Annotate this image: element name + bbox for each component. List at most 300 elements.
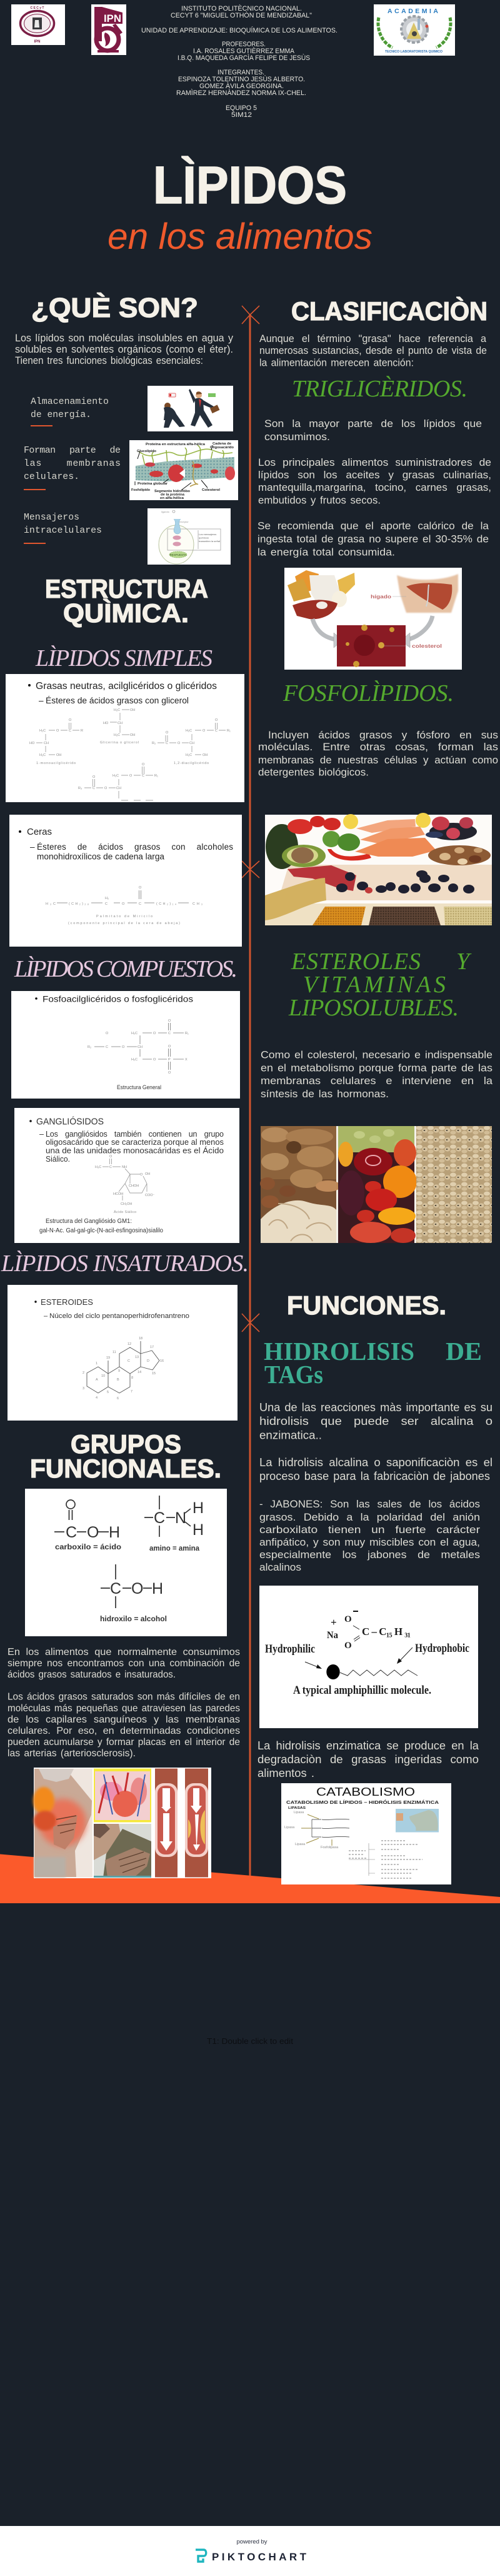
- logo: CECyT seal: IPN: [34, 40, 41, 44]
- chemical structure: ciclopentanoperhidrofenantreno: 10: [101, 1374, 105, 1378]
- panel: ceras: [9, 815, 242, 947]
- heading: lipidos insaturados: LÌPIDOS INSATURADOS.: [1, 1250, 249, 1277]
- panel: gangliosidos: Siálico.: [46, 1155, 70, 1164]
- text: mayor parte de lipidos: [264, 418, 482, 443]
- image: membrana celular: Oligosacárido: [210, 446, 234, 450]
- chemical structure: acido sialico: Ácido Siálico: [114, 1210, 136, 1214]
- chemical structure: fosfoglicerido: O: [168, 1045, 171, 1049]
- chemical structure: fosfoglicerido: O: [153, 1058, 156, 1062]
- chemical structures of glycerides: OH: [130, 733, 135, 737]
- diagram: arteria obstruida: [185, 1768, 208, 1877]
- group: carboxilo: C: [66, 1524, 77, 1541]
- chemical structure: ciclopentanoperhidrofenantreno: A: [96, 1378, 98, 1382]
- group: amino: [144, 1496, 204, 1552]
- text: fosfolipidos: moléculas. Entre otras cosas, forman las: [258, 741, 498, 753]
- image: mensajeros quimicos: Los mensajeros: [199, 533, 216, 536]
- chemical structures of glycerides: C: [69, 729, 71, 733]
- image: mensajeros quimicos: receptor: [179, 520, 189, 523]
- image: catabolismo: Lipasa: [294, 1811, 304, 1814]
- item: membranas celulares: celulares.: [24, 471, 79, 482]
- text: alimentos y acidos grasos: En los alimentos que normalmente consumimos: [8, 1647, 240, 1658]
- text: jabones: grasos. Debido a la polaridad del anión: [259, 1511, 480, 1523]
- chemical structure: palmitato de miricilo: (CH₂)₂₈: [69, 902, 89, 906]
- logo: CECyT seal: [11, 4, 65, 45]
- text: jabones: anfipático, y son muy miscibles con el agua,: [259, 1536, 480, 1548]
- text: definicion de lipidos: Los lípidos son moléculas insolubles en agua y: [15, 332, 233, 344]
- chemical structure: ciclopentanoperhidrofenantreno: 3: [82, 1387, 84, 1391]
- image: catabolismo: CATABOLISMO: [316, 1786, 415, 1798]
- panel: gangliosidos: Los gangliósidos también contienen un grupo: [46, 1130, 224, 1139]
- chemical structures of glycerides: H₂C: [186, 753, 192, 757]
- image: molecula anfifilica: Na: [327, 1630, 338, 1641]
- image: molecula anfifilica: Hydrophilic: [265, 1643, 315, 1656]
- salmon: [355, 819, 436, 857]
- panel: esteroides: ESTEROIDES: [41, 1297, 93, 1307]
- photo: nueces y anacardos: [260, 1126, 341, 1243]
- image: catabolismo: Lipasa: [295, 1843, 306, 1846]
- chemical structures of glycerides: O: [202, 729, 206, 733]
- text: alimentos y acidos grasos: pueden acumularse y formar placas en el interior de: [8, 1737, 240, 1748]
- text: alimentos y acidos grasos: [8, 1647, 240, 1759]
- panel: ceras: monohidroxílicos de cadena larga: [37, 852, 164, 862]
- chemical structure: ciclopentanoperhidrofenantreno: 17: [150, 1346, 154, 1349]
- image: frutos secos, frutas y legumbres: [260, 1126, 492, 1243]
- chemical structure: acido sialico: CH₂OH: [121, 1202, 132, 1206]
- text: colesterol: membranas celulares e interviene en la: [261, 1075, 493, 1087]
- image: membrana celular: Colesterol: [202, 488, 221, 492]
- logo: Academia: ACADEMIA: [388, 8, 438, 15]
- image: membrana celular: de la proteína: [161, 493, 185, 496]
- image: catabolismo: LIPASAS: [288, 1806, 306, 1810]
- chemical structures of glycerides: H₂C: [114, 708, 120, 712]
- chemical structure: fosfoglicerido: O: [168, 1019, 171, 1023]
- logo: IPN shield: [91, 4, 126, 55]
- footer: powered by piktochart: powered by: [236, 2538, 268, 2545]
- text: alimentos y acidos grasos: ácidos grasos saturados e insaturados.: [8, 1669, 176, 1680]
- image: mensajeros quimicos: [148, 508, 231, 565]
- image: mensajeros quimicos: RESPUESTA: [170, 553, 186, 556]
- chemical structures of glycerides: [29, 708, 231, 800]
- chemical structure: acido sialico: OH: [145, 1172, 150, 1176]
- header text block: CECYT 6 "MIGUEL OTHÒN DE MENDIZABAL": [171, 11, 312, 19]
- note: placeholder text: T1: Double click to edit: [207, 2036, 293, 2046]
- chemical structures of glycerides: H₂C: [39, 753, 46, 757]
- header text block: GOMEZ ÀVILA GEORGINA.: [199, 82, 284, 90]
- panel: gangliosidos: [14, 1108, 239, 1243]
- chemical structure: fosfoglicerido: H₂C: [131, 1032, 138, 1035]
- image: catabolismo: [281, 1783, 451, 1884]
- image: membrana celular: Proteína en estructura alfa-hélica: [146, 443, 206, 446]
- text: colesterol: [261, 1049, 493, 1100]
- chemical structure: ciclopentanoperhidrofenantreno: 12: [128, 1342, 131, 1346]
- chemical structure: fosfoglicerido: O: [168, 1071, 171, 1075]
- group: carboxilo: carboxilo = ácido: [55, 1542, 121, 1551]
- chemical structure: ciclopentanoperhidrofenantreno: 11: [112, 1351, 116, 1354]
- image: mensajeros quimicos: químicos: [199, 536, 209, 539]
- chemical structures of glycerides: CH: [189, 742, 194, 745]
- image: membrana celular: Segmento hidrofóbo: [154, 490, 191, 493]
- pomegranate seeds and blueberries: [288, 865, 474, 893]
- header text block: RAMÌREZ HERNÀNDEZ NORMA IX-CHEL.: [176, 89, 306, 97]
- item: mensajeros intracelulares: Mensajeros: [24, 512, 79, 523]
- chemical structure: fosfoglicerido: X: [185, 1058, 188, 1062]
- image: membrana celular: Fosfolípido: [131, 488, 151, 492]
- heading: hidrolisis de tags: HIDROLISIS: [264, 1337, 414, 1366]
- chemical structure: ciclopentanoperhidrofenantreno: 16: [160, 1359, 164, 1363]
- text: aporte calorico: la energía total consumida.: [258, 546, 395, 558]
- text: aunque el termino grasa: Aunque el término "grasa" hace referencia a: [259, 333, 487, 345]
- logo: IPN shield: IPN: [104, 13, 121, 24]
- heading: clasificacion: CLASIFICACIÒN: [291, 296, 488, 326]
- text: jabones: [259, 1498, 480, 1573]
- image: membrana celular: [129, 440, 238, 500]
- text: principales alimentos: [258, 456, 491, 506]
- heading: esteroles y vitaminas liposolubles: LIPOSOLUBLES.: [288, 995, 459, 1021]
- footer: powered by piktochart: [0, 2526, 500, 2576]
- panel: ceras: –: [30, 842, 35, 852]
- text: aunque el termino grasa: [259, 333, 487, 369]
- chemical structures of glycerides: 1-monoacilglicérido: [36, 762, 76, 765]
- image: catabolismo: Lipasa: [284, 1826, 295, 1829]
- chemical structure: ciclopentanoperhidrofenantreno: 6: [117, 1397, 119, 1401]
- group: amino: H: [192, 1499, 204, 1517]
- group: carboxilo: O: [87, 1524, 99, 1541]
- text: aporte calorico: ingesta total de grasa no supere el 30-35% de: [258, 533, 489, 545]
- header text block: I.A. ROSALES GUTIÈRREZ EMMA: [193, 47, 295, 55]
- group: hidroxilo: hidroxilo = alcohol: [100, 1614, 167, 1623]
- photo: frutas: [338, 1126, 417, 1243]
- header text block: 5IM12: [231, 111, 252, 119]
- tomatoes and lemons: [288, 813, 431, 834]
- text: principales alimentos: mantequilla,margarina, tocino, carnes grasas,: [258, 481, 491, 493]
- group: hidroxilo: C: [110, 1580, 121, 1597]
- chemical structure: ciclopentanoperhidrofenantreno: 5: [107, 1391, 109, 1394]
- chemical structure: palmitato de miricilo: C: [139, 902, 141, 906]
- text: definicion de lipidos: solubles en solventes orgánicos (como el éter).: [15, 343, 233, 355]
- chemical structures of glycerides: O: [56, 729, 59, 733]
- heading: hidrolisis de tags: DE: [446, 1337, 482, 1366]
- chemical structures of glycerides: O: [69, 718, 72, 722]
- chemical structures of glycerides: OH: [56, 753, 61, 757]
- chemical structures of glycerides: H₂C: [39, 729, 46, 733]
- heading: fosfolipidos: FOSFOLÌPIDOS.: [282, 680, 454, 707]
- image: molecula anfifilica: O: [344, 1641, 352, 1651]
- image: molecula anfifilica: +: [331, 1616, 337, 1628]
- item: almacenamiento de energia: de energía.: [31, 410, 91, 420]
- text: hidrolisis: proceso base para la fabricaciòn de jabones: [259, 1470, 490, 1482]
- header text block: EQUIPO 5: [226, 104, 257, 112]
- text: definicion de lipidos: Tienen tres funciones biológicas esenciales:: [15, 355, 203, 366]
- text: hidrolisis: Una de las reacciones màs importante es su: [259, 1401, 492, 1414]
- chemical structures of glycerides: CH: [44, 742, 49, 745]
- chemical structure: palmitato de miricilo: C: [105, 902, 108, 906]
- chemical structures of glycerides: R: [81, 729, 83, 733]
- text: alimentos y acidos grasos: Los ácidos grasos saturados son más difíciles de en: [8, 1692, 240, 1702]
- chemical structures of glycerides: OH: [202, 753, 208, 757]
- item: mensajeros intracelulares: [24, 512, 102, 544]
- chemical structures of glycerides: H₂C: [112, 774, 119, 778]
- diagram: arteria sana: [155, 1768, 178, 1877]
- chemical structure: acido sialico: COO⁻: [145, 1194, 155, 1197]
- chemical structure: ciclopentanoperhidrofenantreno: 2: [82, 1371, 84, 1375]
- nuts: [428, 845, 491, 865]
- chemical structures of glycerides: CH: [118, 722, 122, 725]
- text: colesterol: síntesis de las hormonas.: [261, 1088, 389, 1100]
- heading: lipidos simples: LÌPIDOS SIMPLES: [35, 645, 212, 672]
- chemical structure: palmitato de miricilo: (CH₂)₁₄: [156, 902, 177, 906]
- chemical structure: acido sialico: O: [140, 1173, 143, 1177]
- heading: grupos funcionales: FUNCIONALES.: [30, 1454, 221, 1483]
- chemical structures of glycerides: R₁: [154, 774, 158, 778]
- group: carboxilo: [54, 1500, 121, 1551]
- heading: hidrolisis de tags: TAGs: [264, 1360, 323, 1389]
- chemical structure: palmitato de miricilo: H₂: [105, 897, 109, 900]
- image: colesterol e higado: hígado: [371, 594, 391, 600]
- text: principales alimentos: lípidos son los aceites y grasas culinarias,: [258, 469, 491, 481]
- text: alimentos y acidos grasos: de los capilares sanguíneos y las membranas: [8, 1714, 240, 1725]
- panel: grasas neutras: Ésteres de ácidos grasos con glicerol: [46, 696, 189, 705]
- image: energia: [148, 386, 233, 431]
- item: almacenamiento de energia: Almacenamiento: [31, 396, 109, 407]
- title: LÌPIDOS: [153, 156, 347, 214]
- broccoli: [322, 831, 360, 851]
- chemical structure: palmitato de miricilo: Palmitato de Miricilo: [96, 915, 152, 918]
- text: fosfolipidos: membranas de nuestras células y actúan como: [258, 754, 498, 766]
- chemical structure: fosfoglicerido: P: [168, 1058, 171, 1062]
- logo: CECyT seal: C E C y T: [31, 6, 44, 10]
- logo: Academia: TECNICO LABORATORISTA QUIMICO: [385, 50, 442, 54]
- chemical structures of glycerides: CH: [116, 787, 121, 790]
- group: amino: N: [175, 1509, 186, 1527]
- logo: Academia: [374, 4, 455, 56]
- panel: grasas neutras: [6, 674, 244, 802]
- chemical structures of glycerides: O: [92, 775, 96, 779]
- text: definicion de lipidos: [15, 332, 233, 366]
- chemical structure: palmitato de miricilo: [46, 886, 202, 925]
- image: mensajeros quimicos: ligando: [161, 510, 170, 513]
- image: mensajeros quimicos: transmiten la señal: [199, 540, 220, 543]
- central timeline with chevrons: [242, 306, 259, 1876]
- chemical structure: palmitato de miricilo: O: [139, 886, 142, 890]
- panel: ceras: Ésteres de ácidos grasos con alcoholes: [37, 842, 233, 852]
- chemical structure: ciclopentanoperhidrofenantreno: 4: [96, 1396, 98, 1400]
- heading: trigliceridos: TRIGLICÈRIDOS.: [292, 376, 468, 402]
- plate: [278, 865, 492, 900]
- text: colesterol: en el metabolismo porque forma parte de las: [261, 1062, 492, 1074]
- chemical structure: acido sialico: H₃C: [95, 1165, 101, 1169]
- chemical structure: acido sialico: O: [109, 1155, 112, 1159]
- image: colesterol e higado: colesterol: [412, 643, 442, 649]
- chemical structure: ciclopentanoperhidrofenantreno: 9: [118, 1369, 120, 1373]
- image: catabolismo: Fosfolipasa: [321, 1846, 339, 1849]
- image: molecula anfifilica: [259, 1586, 478, 1728]
- chili pepper: [328, 849, 371, 860]
- chemical structure: fosfoglicerido: C: [106, 1045, 108, 1049]
- image: molecula anfifilica: A typical amphiphillic molecule.: [293, 1684, 431, 1697]
- image: membrana celular: Proteína globular: [138, 482, 168, 486]
- chemical structures of glycerides: HO: [29, 742, 35, 745]
- image: colesterol e higado: [284, 568, 462, 670]
- chemical structure: fosfoglicerido: CH: [138, 1045, 142, 1049]
- chemical structures of glycerides: O: [142, 763, 145, 767]
- image: membrana celular: Cadena de: [212, 442, 231, 446]
- chemical structure: acido sialico: C: [109, 1165, 112, 1169]
- text: jabones: especialmente los jabones de metales: [259, 1549, 480, 1561]
- chemical structure: ciclopentanoperhidrofenantreno: 15: [152, 1372, 156, 1376]
- chemical structure: fosfoglicerido: H₂C: [131, 1058, 138, 1062]
- panel: fosfoacilgliceridos: Estructura General: [117, 1084, 161, 1091]
- heading: hidrolisis de tags: [264, 1337, 482, 1389]
- chemical structures of glycerides: O: [178, 742, 181, 745]
- chemical structure: ciclopentanoperhidrofenantreno: 14: [138, 1371, 141, 1374]
- chemical structure: ciclopentanoperhidrofenantreno: 8: [131, 1376, 133, 1380]
- text: jabones: alcalinos: [259, 1561, 301, 1573]
- chemical structures of glycerides: O: [166, 731, 169, 735]
- image: molecula anfifilica: O: [344, 1614, 352, 1624]
- item: almacenamiento de energia: [31, 396, 109, 426]
- heading: lipidos compuestos: LÌPIDOS COMPUESTOS.: [14, 956, 238, 982]
- icon: piktochart logo: [196, 2550, 206, 2562]
- panel: gangliosidos: oligosacárido que se caracteriza porque al menos: [46, 1138, 224, 1147]
- chemical structures of glycerides: R₃: [78, 787, 82, 790]
- chemical structure: ciclopentanoperhidrofenantreno: [82, 1337, 164, 1401]
- chemical structures of glycerides: C: [142, 774, 144, 778]
- heading: esteroles y vitaminas liposolubles: ESTEROLES: [291, 948, 421, 975]
- header text block: INTEGRANTES.: [218, 69, 264, 76]
- chemical structure: fosfoglicerido: R₂: [88, 1045, 91, 1049]
- avocado: [266, 824, 326, 869]
- panel: gangliosidos: una de las unidades monosacáridas es el Ácido: [46, 1145, 224, 1155]
- panel: grasas neutras: –: [39, 696, 44, 705]
- text: mayor parte de lipidos: consumimos.: [264, 431, 330, 443]
- chemical structures of glycerides: C: [92, 787, 95, 790]
- text: principales alimentos: Los principales alimentos suministradores de: [258, 456, 491, 468]
- image: enfermedad cardiaca y arterias: [33, 1768, 211, 1878]
- text: jabones: carboxilato tienen un fuerte carácter: [259, 1524, 480, 1536]
- text: colesterol: Como el colesterol, necesario e indispensable: [261, 1049, 492, 1060]
- text: hidrolisis enzimatica: alimentos .: [258, 1767, 314, 1779]
- chemical structures of glycerides: R₂: [152, 742, 156, 745]
- chemical structure: ciclopentanoperhidrofenantreno: D: [147, 1359, 149, 1363]
- chemical structure: fosfoglicerido: O: [106, 1032, 109, 1035]
- chemical structure: palmitato de miricilo: O: [122, 902, 125, 906]
- text: principales alimentos: embutidos y frutos secos.: [258, 494, 381, 506]
- chemical structure: fosfoglicerido: O: [122, 1045, 125, 1049]
- panel: esteroides: Núcelo del ciclo pentanoperhidrofenantreno: [49, 1312, 189, 1320]
- heading: estructura quimica: ESTRUCTURA: [45, 574, 208, 603]
- chemical structures of glycerides: H₂C: [114, 733, 120, 737]
- chemical structure: ciclopentanoperhidrofenantreno: 18: [139, 1337, 142, 1341]
- group: hidroxilo: O: [131, 1580, 143, 1597]
- image: membrana celular: en alfa-hélica: [160, 496, 184, 500]
- chemical structures of glycerides: 1,2-diacilglicérido: [174, 762, 209, 765]
- header text block: PROFESORES.: [222, 41, 266, 48]
- text: aunque el termino grasa: numerosas sustancias, desde el punto de vista de: [259, 345, 487, 356]
- group: carboxilo: H: [109, 1524, 120, 1541]
- text: hidrolisis enzimatica: degradaciòn de grasas ingeridas como: [258, 1753, 479, 1766]
- heading: esteroles y vitaminas liposolubles: VITAMINAS: [303, 972, 446, 998]
- photo: frijoles: [416, 1126, 492, 1243]
- photo: corazon: [94, 1768, 151, 1822]
- image: molecula anfifilica: C – C₁₅ H ₃₁: [362, 1626, 411, 1638]
- text: jabones: - JABONES: Son las sales de los ácidos: [259, 1498, 480, 1510]
- text: alimentos y acidos grasos: las arterias (arteriosclerosis).: [8, 1748, 136, 1759]
- chemical structures of glycerides: O: [129, 774, 132, 778]
- image: alimentos con grasas saludables: [265, 813, 492, 925]
- heading: grupos funcionales: [30, 1429, 221, 1483]
- heading: que son: ¿QUÈ SON?: [31, 292, 198, 323]
- panel: gangliosidos: Estructura del Gangliósido GM1:: [46, 1217, 132, 1225]
- group: amino: H: [192, 1521, 204, 1539]
- item: mensajeros intracelulares: intracelulares: [24, 525, 102, 536]
- chemical structure: acido sialico: HCOH: [113, 1192, 123, 1196]
- photo: dolor en el pecho: [33, 1768, 92, 1877]
- text: fosfolipidos: Incluyen ácidos grasos y fósforo en sus: [268, 729, 498, 741]
- panel: fosfoacilgliceridos: [11, 991, 240, 1099]
- berries and strawberries: [426, 817, 477, 840]
- header text block: [141, 4, 338, 119]
- chemical structure: palmitato de miricilo: H₃C: [46, 902, 56, 906]
- heading: estructura quimica: QUÌMICA.: [63, 598, 189, 628]
- chemical structure: acido sialico: NH: [122, 1165, 127, 1169]
- chemical structure: fosfoglicerido: [88, 1019, 189, 1075]
- subtitle: en los alimentos: [108, 216, 372, 257]
- image: catabolismo: CATABOLISMO DE LÍPIDOS – HIDRÓLISIS ENZIMÁTICA: [286, 1799, 439, 1805]
- heading: grupos funcionales: GRUPOS: [71, 1429, 181, 1459]
- text: alimentos y acidos grasos: celulares. Por eso, en determinadas condiciones: [8, 1726, 240, 1736]
- text: alimentos y acidos grasos: moléculas más pequeñas que atraviesen las paredes: [8, 1703, 240, 1714]
- photo: hombre con mano en el pecho: [94, 1824, 151, 1878]
- chemical structures of glycerides: HO: [103, 722, 109, 725]
- chemical structure: fosfoglicerido: R₁: [185, 1032, 189, 1035]
- text: hidrolisis: [259, 1401, 492, 1482]
- chemical structure: ciclopentanoperhidrofenantreno: C: [128, 1359, 130, 1363]
- text: aunque el termino grasa: la alimentación merecen atención:: [259, 356, 414, 369]
- chemical structure: ciclopentanoperhidrofenantreno: 13: [135, 1356, 139, 1359]
- item: membranas celulares: las membranas: [24, 458, 121, 469]
- text: hidrolisis: La hidrolisis alcalina o saponificaciòn es el: [259, 1456, 492, 1469]
- text: hidrolisis enzimatica: La hidrolisis enzimatica se produce en la: [258, 1739, 479, 1752]
- text: aporte calorico: [258, 520, 489, 558]
- chemical structure: acido sialico: CHOH: [129, 1184, 139, 1188]
- chemical structures of glycerides: R₁: [227, 729, 231, 733]
- chemical structure: ciclopentanoperhidrofenantreno: B: [117, 1378, 119, 1382]
- item: membranas celulares: Forman parte de: [24, 445, 121, 456]
- text: fosfolipidos: detergentes biológicos.: [258, 767, 369, 778]
- text: alimentos y acidos grasos: siempre nos encontramos con una combinación de: [8, 1658, 240, 1669]
- panel: esteroides: [8, 1285, 238, 1421]
- chemical structures of glycerides: O: [104, 787, 108, 790]
- chemical structure: ciclopentanoperhidrofenantreno: 1: [96, 1362, 98, 1366]
- text: hidrolisis: hidrolisis que puede ser alcalina o: [259, 1415, 492, 1427]
- chemical structures of glycerides: O: [215, 718, 218, 722]
- panel: ceras: Ceras: [27, 827, 52, 837]
- chemical structures of glycerides: C: [215, 729, 218, 733]
- panel: gangliosidos: gal-N-Ac. Gal-gal-glc-(N-acil-esfingosina)sialilo: [39, 1227, 163, 1234]
- heading: esteroles y vitaminas liposolubles: [288, 948, 472, 1021]
- footer: powered by piktochart: PIKTOCHART: [212, 2551, 307, 2563]
- header text block: ESPINOZA TOLENTINO JESÙS ALBERTO.: [178, 75, 305, 83]
- heading: funciones: FUNCIONES.: [287, 1291, 446, 1320]
- header text block: UNIDAD DE APRENDIZAJE: BIOQUÍMICA DE LOS ALIMENTOS.: [141, 26, 338, 34]
- panel: grasas neutras: Grasas neutras, acilglicéridos o glicéridos: [36, 681, 217, 692]
- text: hidrolisis enzimatica: [258, 1739, 479, 1779]
- heading: esteroles y vitaminas liposolubles: Y: [456, 948, 472, 975]
- text: mayor parte de lipidos: Son la mayor parte de los lípidos que: [264, 418, 482, 430]
- panel: fosfoacilgliceridos: Fosfoacilglicéridos o fosfoglicéridos: [42, 994, 193, 1004]
- chemical structure: palmitato de miricilo: (componente principal de la cera de abeja): [68, 922, 180, 925]
- chemical structures of glycerides: OH: [130, 708, 135, 712]
